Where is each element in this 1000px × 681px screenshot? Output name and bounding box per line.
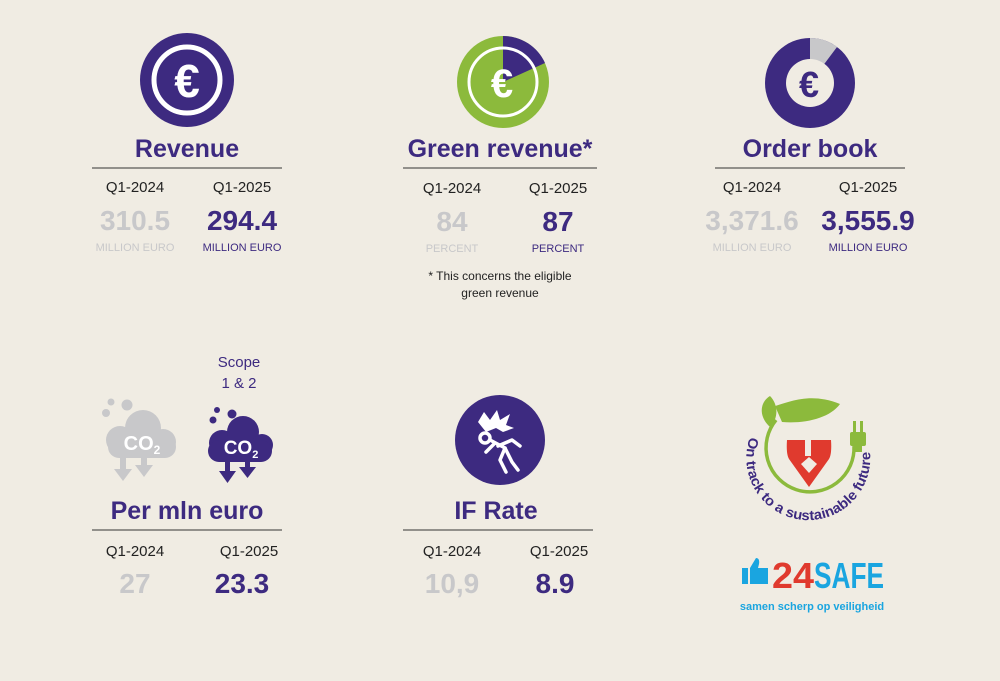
panel: IF rate bbox=[403, 395, 593, 599]
heading: Per mln euro: Per mln euro bbox=[111, 497, 263, 525]
data: CO2 values bbox=[106, 543, 278, 599]
data: CO2 values: Q1-2024 bbox=[106, 543, 164, 560]
data: IF rate values: Q1-2024 bbox=[423, 543, 481, 560]
data: green revenue values: 84 bbox=[436, 206, 468, 237]
footnote: * This concerns the eligible bbox=[428, 269, 572, 283]
data: revenue values: MILLION EURO bbox=[96, 242, 175, 254]
footnote bbox=[428, 269, 572, 300]
data: IF rate values bbox=[423, 543, 588, 599]
data: IF rate values: 10,9 bbox=[425, 568, 479, 599]
icon: green revenue pie: € bbox=[491, 62, 513, 106]
data: order book values bbox=[705, 179, 915, 254]
icon: euro circle bbox=[140, 33, 234, 127]
label: scope 1 & 2 bbox=[218, 354, 260, 392]
panel: revenue bbox=[92, 33, 282, 254]
data: IF rate values: Q1-2025 bbox=[530, 543, 588, 560]
data: revenue values bbox=[96, 179, 282, 254]
logo: on track to a sustainable future bbox=[746, 396, 870, 520]
data: green revenue values: 87 bbox=[542, 206, 574, 237]
logo: 24SAFE: SAFE bbox=[814, 555, 884, 596]
data: revenue values: 294.4 bbox=[207, 205, 277, 236]
footnote: green revenue bbox=[461, 286, 539, 300]
logo: 24SAFE bbox=[740, 555, 884, 613]
icon: purple CO2 cloud bbox=[208, 407, 273, 483]
data: order book values: 3,371.6 bbox=[705, 205, 799, 236]
label: scope 1 & 2: 1 & 2 bbox=[221, 375, 257, 392]
data: CO2 values: 27 bbox=[119, 568, 151, 599]
data: revenue values: MILLION EURO bbox=[203, 242, 282, 254]
panel: CO2 per mln euro bbox=[92, 354, 282, 599]
icon: accident figure bbox=[455, 395, 545, 485]
icon: green revenue pie bbox=[457, 36, 549, 128]
data: revenue values: Q1-2025 bbox=[213, 179, 271, 196]
data: green revenue values: PERCENT bbox=[532, 243, 585, 255]
icon: grey CO2 cloud: 2 bbox=[154, 443, 161, 457]
data: revenue values: 310.5 bbox=[100, 205, 170, 236]
icon: order book donut bbox=[765, 38, 855, 128]
icon: grey CO2 cloud: CO bbox=[124, 433, 154, 455]
heading: IF Rate: IF Rate bbox=[454, 497, 538, 525]
data: CO2 values: 23.3 bbox=[215, 568, 269, 599]
icon: purple CO2 cloud: CO bbox=[224, 438, 252, 459]
data: IF rate values: 8.9 bbox=[536, 568, 574, 599]
data: order book values: 3,555.9 bbox=[821, 205, 915, 236]
heading: Order book: Order book bbox=[743, 135, 877, 163]
panel: order book bbox=[705, 38, 915, 254]
data: order book values: MILLION EURO bbox=[829, 242, 908, 254]
icon: purple CO2 cloud: 2 bbox=[252, 449, 258, 461]
panel: green revenue bbox=[403, 36, 597, 300]
label: scope 1 & 2: Scope bbox=[218, 354, 260, 371]
icon: euro circle: € bbox=[174, 55, 200, 107]
logo: 24SAFE: samen scherp op veiligheid bbox=[740, 601, 884, 613]
data: revenue values: Q1-2024 bbox=[106, 179, 164, 196]
data: order book values: MILLION EURO bbox=[713, 242, 792, 254]
data: CO2 values: Q1-2025 bbox=[220, 543, 278, 560]
heading: Green revenue: Green revenue* bbox=[408, 135, 593, 163]
data: green revenue values: PERCENT bbox=[426, 243, 479, 255]
logo: 24SAFE: 24 bbox=[772, 555, 814, 596]
heading: Revenue: Revenue bbox=[135, 135, 239, 163]
data: order book values: Q1-2025 bbox=[839, 179, 897, 196]
data: green revenue values: Q1-2025 bbox=[529, 180, 587, 197]
data: green revenue values bbox=[423, 180, 587, 255]
logo: on track to a sustainable future: On track to a sustainable future bbox=[746, 438, 870, 520]
data: green revenue values: Q1-2024 bbox=[423, 180, 481, 197]
icon: order book donut: € bbox=[799, 64, 819, 105]
icon: grey CO2 cloud bbox=[102, 398, 176, 481]
data: order book values: Q1-2024 bbox=[723, 179, 781, 196]
